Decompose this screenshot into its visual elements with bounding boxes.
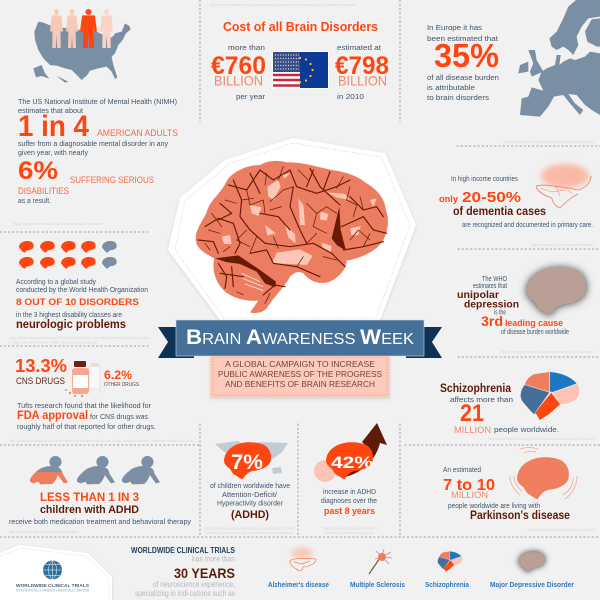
panel: 8 out of 10 disorders [9, 241, 150, 344]
logo text: WORLDWIDE CLINICAL TRIALS [16, 583, 89, 588]
text: unipolar depression: unipolar [457, 289, 499, 301]
text: is the: is the [494, 308, 506, 316]
label: suffering serious disabilities: SUFFERING SERIOUS [70, 175, 154, 185]
icon: USA map [33, 22, 131, 83]
text: Tufts research [17, 401, 156, 431]
text: Tufts research: roughly half of that reported for other drugs. [17, 422, 156, 431]
source url: http://www.cdc.gov/ncbddd/adhd/data.html [9, 530, 78, 534]
text: diagnoses increase [321, 487, 377, 516]
text: children with ADHD: children with ADHD [40, 504, 139, 516]
label: Alzheimer's disease [268, 580, 329, 589]
text: unipolar depression [457, 289, 519, 310]
panel: US adults statistics [13, 9, 178, 226]
text: Parkinson's disease: Parkinson's disease [470, 508, 570, 522]
stat: 30 years: 30 YEARS [174, 565, 235, 581]
label: ADHD: (ADHD) [231, 509, 269, 521]
source url: http://www.alz.co.uk/research/statistics [531, 243, 594, 247]
panel: 42% increase in ADHD [314, 423, 387, 535]
text: WHO: estimates that [473, 281, 508, 290]
text: NIMH intro: estimates that about [18, 106, 84, 115]
source url: http://www.clinicalleader.com/doc/obtaining-fda-approval-for-cns-drugs-remains-industry-challenge-study-finds-0001 [9, 439, 194, 443]
text: diagnosable disorder: given year, with nearly [18, 148, 88, 157]
text: experience: of neuroscience experience, [153, 580, 235, 589]
stat: US cost: more than [228, 43, 265, 52]
callout: campaign description [210, 356, 390, 398]
text: disease burden: is attributable [427, 83, 475, 92]
callout: campaign description: AND BENEFITS OF BRAIN RESEARCH [225, 380, 375, 389]
text: ADHD definition: Hyperactivity disorder [217, 498, 283, 508]
item: Alzheimer's disease [268, 548, 329, 589]
text: Europe intro: In Europe it has [427, 23, 482, 32]
text: disease burden: of disease burden worldwide [501, 327, 569, 336]
stat: 3rd leading cause [481, 314, 563, 329]
heading: schizophrenia: Schizophrenia [440, 381, 511, 395]
stat: less than 1 in 3: LESS THAN 1 IN 3 [40, 492, 139, 504]
panel: dementia [439, 164, 594, 247]
text: WHO [473, 274, 508, 290]
panel: unipolar depression [457, 267, 594, 354]
text: WHO: The WHO [482, 274, 507, 283]
stat: 3rd leading cause: leading cause [505, 318, 563, 329]
source url: https://ocgovern.mit.edu/brain-disorders-by-the-numbers [503, 140, 594, 144]
source url: https://www.aan.com/uploadedFiles/Website_Library_Assets/Documents/4.Public_Policy/ [9, 336, 150, 340]
panel: Parkinson's disease [443, 448, 595, 532]
label: suffering serious disabilities: DISABILITIES [18, 186, 69, 196]
text: dementia cases: of dementia cases [453, 204, 546, 218]
source url: https://ocgovern.mit.edu/brain-disorders-by-the-numbers [13, 222, 103, 226]
text: WHO study: According to a global study [16, 277, 96, 286]
stat: 3rd leading cause: 3rd [481, 314, 503, 329]
text: disease burden [427, 73, 499, 102]
stat: 6.2% other drugs: OTHER DRUGS [104, 382, 140, 388]
text: Tufts research: Tufts research found that the likelihood for [17, 401, 151, 410]
source url: http://www.who.int/mental_health/management/schizophrenia/en/ [488, 437, 594, 441]
stat: EU cost: BILLION [338, 72, 387, 88]
ribbon: Brain Awareness Week [158, 320, 442, 358]
icon: pie chart brain [520, 372, 580, 420]
panel: Europe disease burden [427, 0, 600, 144]
text: diagnoses increase: diagnoses over the [321, 496, 377, 505]
source url: 02/about-7-percent-of-kids-worldwide-have-adhd-study [205, 531, 293, 535]
panel: children with ADHD treatment [9, 456, 191, 534]
icon: trembling brain [510, 448, 577, 499]
text: diagnosable disorder: suffer from a diagnosable mental disorder in any [18, 139, 168, 148]
icon: world map [215, 441, 288, 474]
text: as a result: as a result. [18, 196, 51, 205]
arrow: upward trend [335, 423, 387, 478]
stat: 35%: 35% [434, 37, 499, 74]
text: disease burden: of all disease burden [427, 73, 499, 82]
source url [9, 336, 150, 344]
stat: EU cost [335, 43, 389, 101]
panel: central brain badge [158, 138, 442, 398]
text: disability classes: in the 3 highest disability classes are [16, 310, 122, 319]
icon: US and EU flag [272, 51, 329, 89]
source url: http://www.brainfacts.org/policymakers/global-burden-of-neurological-and-mental-disorders/ [210, 3, 356, 7]
stat: 13.3% CNS drugs [15, 356, 67, 386]
stat: EU cost: €798 [335, 52, 389, 80]
text: disease burden: to brain disorders [427, 93, 489, 102]
icon: row of brains [19, 241, 117, 269]
text: affects: affects more than [450, 395, 513, 404]
stat: US cost [211, 43, 266, 101]
stat: 20-50% [439, 189, 521, 206]
stat: 42%: 42% [331, 453, 373, 472]
callout: campaign description: PUBLIC AWARENESS OF THE PROGRESS [218, 370, 383, 379]
text: ADHD definition: Attention-Deficit/ [222, 490, 278, 499]
stat: 7%: 7% [231, 451, 263, 474]
label: suffering serious disabilities [18, 175, 154, 196]
stat: US cost: per year [236, 92, 265, 101]
stat: US cost: BILLION [214, 72, 263, 88]
icon: small pie brain [438, 551, 462, 572]
source url: http://health.usnews.com/health-news/articles/2013/03/ [205, 526, 295, 530]
text: WHO study [16, 277, 148, 294]
text: diagnosable disorder [18, 139, 168, 157]
text: unipolar depression: depression [464, 298, 519, 310]
icon: fading brain outline [536, 164, 591, 208]
text: NIMH intro: The US National Institute of Mental Health (NIMH) [18, 97, 177, 106]
text: experience [135, 580, 235, 598]
panel: cost of brain disorders [210, 3, 389, 101]
icon: orange brain [224, 442, 271, 479]
text: income countries: In high income countries [451, 174, 518, 183]
panel: Worldwide Clinical Trials logo [0, 545, 112, 600]
stat: 20-50%: 20-50% [462, 189, 521, 206]
stat: 21: 21 [460, 400, 484, 427]
text: Europe intro [427, 23, 499, 43]
text: has more than: has more than [192, 554, 235, 564]
stat: EU cost: estimated at [337, 43, 382, 52]
icon: crawling babies [30, 456, 160, 484]
text: diagnoses increase: increase in ADHD [323, 487, 376, 496]
text: people worldwide: people worldwide. [494, 425, 559, 434]
panel: 7% ADHD worldwide [205, 441, 295, 535]
label: Schizophrenia [425, 580, 470, 589]
text: an estimated: An estimated [443, 465, 481, 474]
source url: https://ocgovern.mit.edu/brain-disorders-by-the-numbers [501, 350, 594, 354]
text: Tufts research: for CNS drugs was [90, 412, 148, 421]
callout: campaign description: A GLOBAL CAMPAIGN TO INCREASE [225, 360, 376, 369]
panel: FDA approval of CNS drugs [9, 356, 194, 443]
label: Major Depressive Disorder [490, 580, 574, 589]
item: Schizophrenia [425, 551, 470, 589]
text: people living: people worldwide are living with [448, 501, 540, 510]
icon: pink brain [314, 460, 336, 482]
text: Tufts research: FDA approval [17, 408, 88, 422]
stat: 8 out of 10: 8 OUT OF 10 DISORDERS [16, 297, 139, 308]
stat: 20-50%: only [439, 194, 458, 204]
stat: 7 to 10: 7 to 10 [443, 477, 495, 494]
icon: globe [43, 560, 62, 580]
icon: shadowed small brain [518, 551, 545, 573]
text: NIMH intro [18, 97, 177, 115]
text: Europe intro: been estimated that [427, 34, 499, 43]
source url [323, 526, 378, 535]
stat: 6.2% other drugs [104, 368, 140, 388]
label: million: MILLION [451, 490, 488, 500]
heading: cost: Cost of all Brain Disorders [223, 19, 378, 34]
label: Multiple Sclerosis [350, 580, 405, 589]
text: neurologic problems: neurologic problems [16, 317, 126, 331]
icon: brain [196, 161, 388, 313]
source url: http://www.pdf.org/en/parkinson_statistics [527, 528, 595, 532]
label: American adults: AMERICAN ADULTS [97, 128, 178, 138]
source url: 1_Stay_Informed/4.Public_Policy_Resources/compell.pdf [9, 340, 97, 344]
stat: 6%: 6% [18, 157, 58, 185]
logo text: SCIENTIFICALLY MINDED • MEDICALLY DRIVEN [16, 588, 90, 592]
stat: 13.3% CNS drugs: CNS DRUGS [16, 376, 65, 386]
item: Major Depressive Disorder [490, 551, 574, 589]
item: Multiple Sclerosis [350, 549, 405, 589]
logo backdrop [0, 545, 112, 600]
text: diagnoses increase: past 8 years [324, 506, 375, 516]
icon: pill bottles [65, 361, 106, 397]
icon: Alzheimer brain [290, 548, 316, 571]
heading: worldwide clinical trials: WORLDWIDE CLINICAL TRIALS [131, 546, 236, 555]
stat: EU cost: in 2010 [337, 92, 364, 101]
label: million: MILLION [454, 425, 491, 436]
text: ADHD definition: of children worldwide have [210, 481, 290, 490]
icon: four people [50, 9, 113, 48]
text: ADHD definition [210, 481, 290, 508]
icon: orange brain [326, 442, 373, 479]
panel: clinical trials experience [131, 546, 236, 598]
stat: 13.3% CNS drugs: 13.3% [15, 356, 67, 376]
icon: Europe map [518, 0, 600, 117]
source url: adhd/facts-statistics-infographic [323, 531, 374, 535]
logo text [16, 583, 90, 592]
stat: US cost: €760 [211, 52, 266, 80]
source url [205, 526, 295, 535]
stat: 1 in 4: 1 in 4 [18, 110, 89, 143]
panel: schizophrenia [440, 372, 594, 441]
text: experience: specializing in indi-cations such as [135, 589, 235, 598]
text: therapy: receive both medication treatment and behavioral therapy [9, 517, 191, 526]
stat: 6.2% other drugs: 6.2% [104, 368, 132, 382]
source url: http://www.healthline.com/health/ [323, 526, 378, 530]
icon: shadowed brain [526, 267, 587, 316]
icon: neuron [369, 549, 392, 574]
text: WHO study: conducted by the World Health Organization [16, 285, 148, 294]
octagon backdrop [168, 138, 416, 320]
ribbon: Brain Awareness Week: BRAIN AWARENESS WEEK [186, 326, 415, 349]
